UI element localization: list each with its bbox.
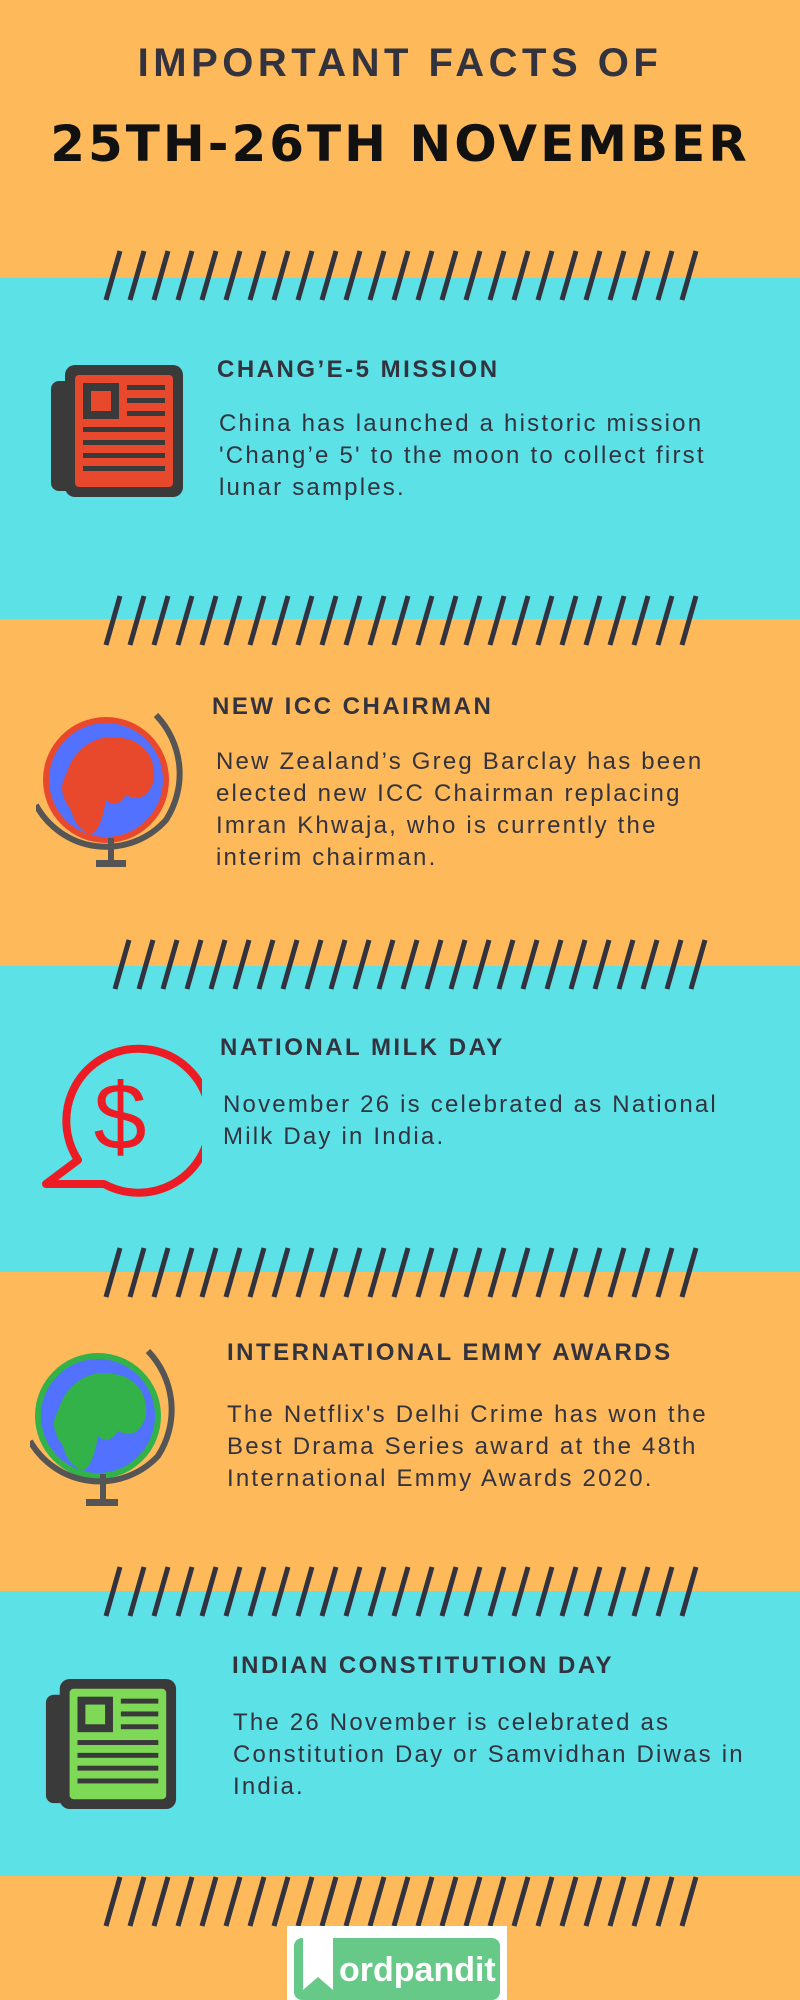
text: Best Drama Series award at the 48th [227,1433,698,1460]
text: India. [233,1773,305,1800]
panel: indian constitution day [46,1652,745,1809]
heading: INTERNATIONAL EMMY AWARDS [227,1339,673,1366]
icon: newspaper green [46,1679,176,1809]
text: interim chairman. [216,844,437,871]
text: Milk Day in India. [223,1123,445,1150]
text: The Netflix's Delhi Crime has won the [227,1401,708,1428]
title line 1: IMPORTANT FACTS OF [138,41,662,85]
text: elected new ICC Chairman replacing [216,780,682,807]
text: The 26 November is celebrated as [233,1709,670,1736]
text [216,748,703,871]
heading: NATIONAL MILK DAY [220,1034,505,1061]
heading: NEW ICC CHAIRMAN [212,693,493,720]
icon: dollar speech bubble [42,1044,202,1197]
heading: INDIAN CONSTITUTION DAY [232,1652,614,1679]
icon: globe red [36,712,183,867]
text: November 26 is celebrated as National [223,1091,718,1118]
title [50,41,750,173]
icon: dollar speech bubble: $ [94,1064,146,1170]
text: Constitution Day or Samvidhan Diwas in [233,1741,745,1768]
text: International Emmy Awards 2020. [227,1465,654,1492]
logo: wordpandit [287,1926,507,2000]
text [227,1401,708,1492]
panel: national milk day [42,1034,718,1197]
text: 'Chang’e 5' to the moon to collect first [219,442,706,469]
title line 2: 25TH-26TH NOVEMBER [50,115,750,173]
panel: international emmy awards [30,1339,708,1506]
text [233,1709,745,1800]
icon: newspaper red [51,365,183,497]
panel: chang'e-5 mission [51,356,706,501]
text [223,1091,718,1150]
text [219,410,706,501]
logo: wordpandit: ordpandit [339,1951,496,1989]
panel: new icc chairman [36,693,703,871]
text: China has launched a historic mission [219,410,703,437]
text: New Zealand’s Greg Barclay has been [216,748,703,775]
text: Imran Khwaja, who is currently the [216,812,658,839]
icon: globe green [30,1348,175,1506]
text: lunar samples. [219,474,406,501]
heading: CHANG’E-5 MISSION [217,356,500,383]
